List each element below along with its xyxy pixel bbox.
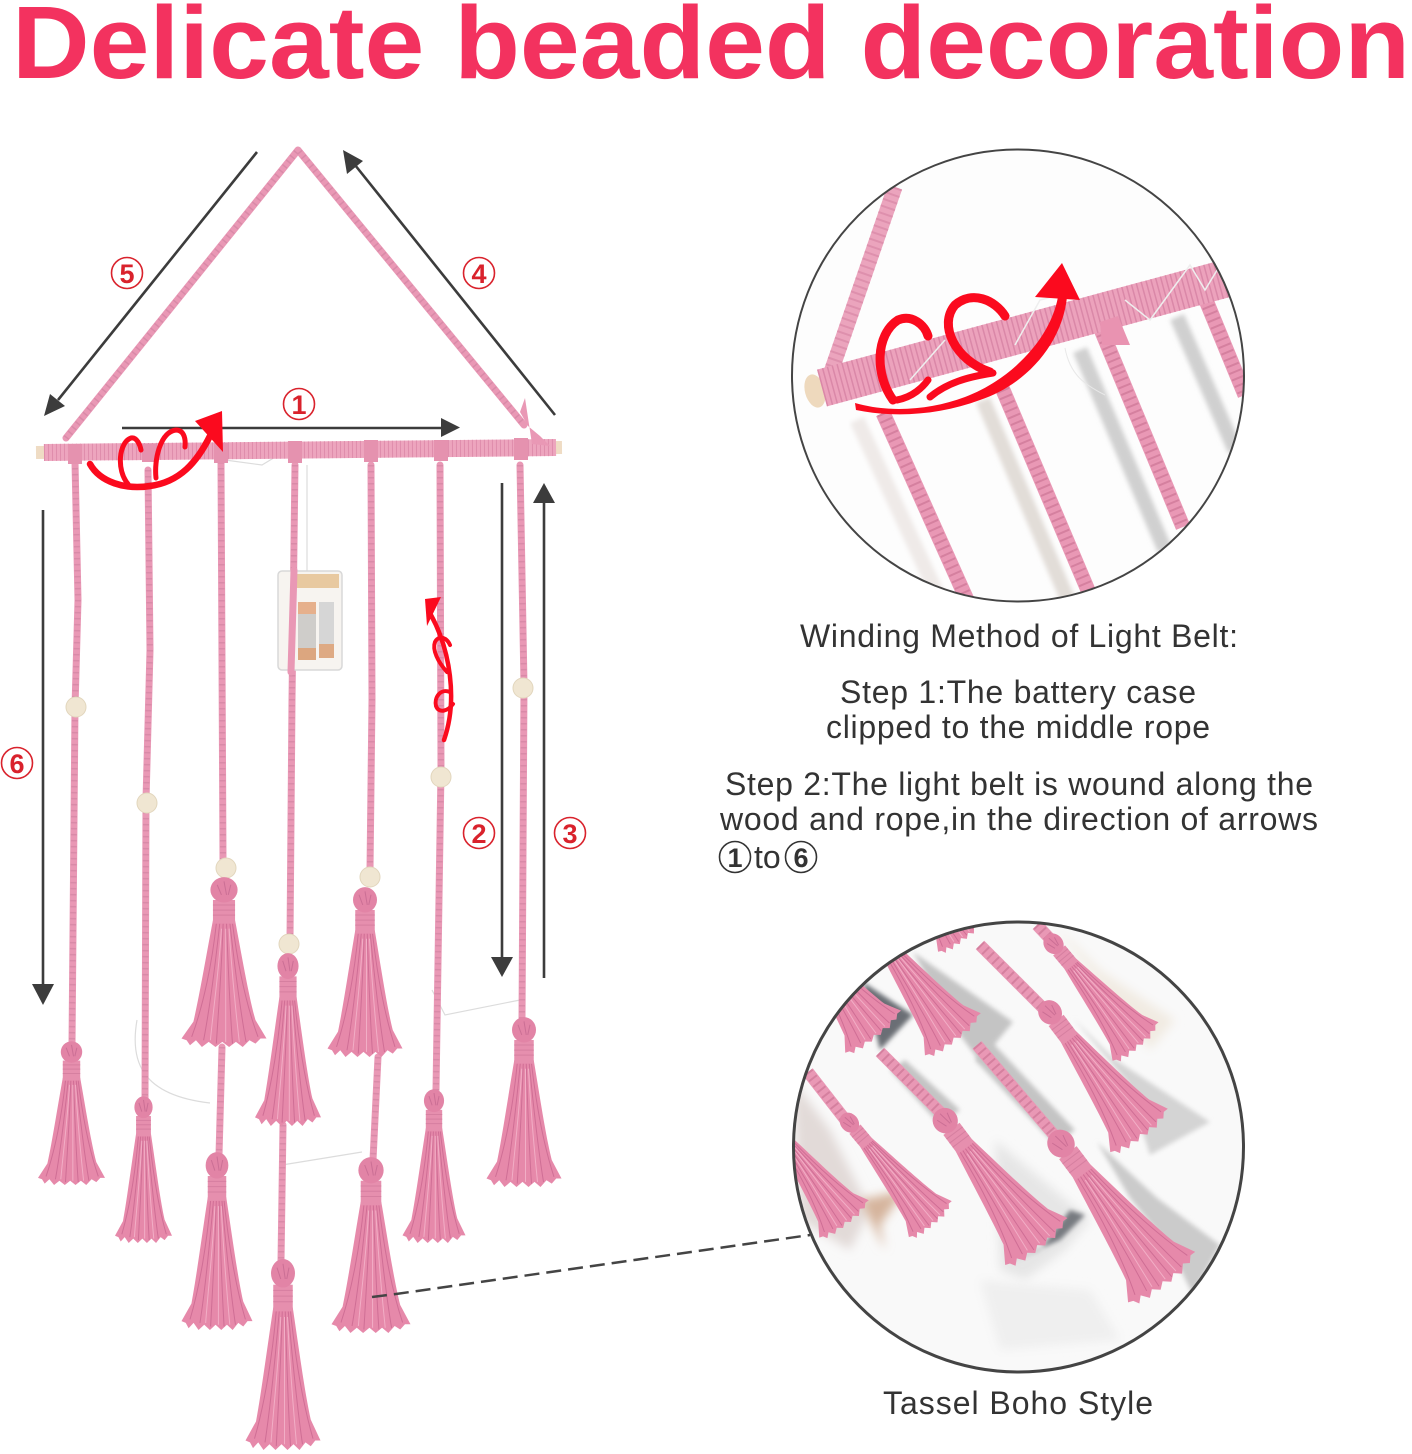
step 2: Step 2:The light belt is wound along the: [725, 766, 1313, 802]
arrow 5: from apex: [44, 152, 257, 416]
tassel detail image: [792, 920, 1245, 1374]
hanging decoration: [36, 150, 562, 1450]
number 4: 4: [471, 259, 487, 289]
circle border: [792, 150, 1244, 602]
circle detail: rod winding: [792, 150, 1250, 602]
arrow 1: along rod: [122, 418, 460, 437]
rope braid texture: [72, 462, 524, 1262]
LED wires: [135, 442, 520, 1165]
instructions heading: Winding Method of Light Belt:: [800, 618, 1238, 654]
vertical ropes: [72, 462, 524, 1262]
number 6: [2, 748, 32, 779]
circle detail: tassels: [792, 920, 1245, 1374]
triangle rope braid: [66, 150, 524, 438]
tassels: [38, 877, 562, 1450]
rod detail image: [801, 187, 1250, 600]
number 1: 1: [291, 390, 307, 420]
step 1: clipped to the middle rope: [826, 709, 1210, 745]
red winding arrow on rope: [425, 597, 453, 740]
wooden rod: [36, 398, 562, 464]
number 6: 6: [9, 749, 25, 779]
arrow 6: down left: [32, 510, 54, 1005]
number 3: [554, 818, 586, 849]
red spiral arrow: [855, 263, 1080, 414]
step 2: 6: [793, 843, 809, 873]
arrow 3: up: [533, 483, 555, 978]
winding instructions: [719, 618, 1318, 875]
step 2: wood and rope,in the direction of arrows: [719, 801, 1318, 837]
step 2: 1: [727, 843, 743, 873]
hanging triangle rope: [66, 150, 524, 438]
red winding arrow on rod: [90, 411, 223, 487]
step 2: [719, 766, 1318, 875]
arrow 4: to apex: [343, 150, 555, 415]
number 2: [464, 818, 494, 849]
arrow 2: down: [491, 483, 513, 977]
number 5: [112, 258, 142, 289]
battery case: [278, 570, 342, 672]
circle border: [794, 922, 1244, 1372]
step 2: to: [754, 839, 781, 875]
wooden beads: [66, 678, 533, 954]
number 3: 3: [562, 819, 578, 849]
step 1: Step 1:The battery case: [840, 674, 1196, 710]
number 1: [284, 388, 314, 420]
dashed callout line: [372, 1235, 810, 1297]
number 5: 5: [119, 259, 135, 289]
number 4: [464, 258, 494, 289]
number 2: 2: [471, 819, 487, 849]
step 1: [826, 674, 1210, 745]
tassel caption: Tassel Boho Style: [883, 1385, 1153, 1421]
